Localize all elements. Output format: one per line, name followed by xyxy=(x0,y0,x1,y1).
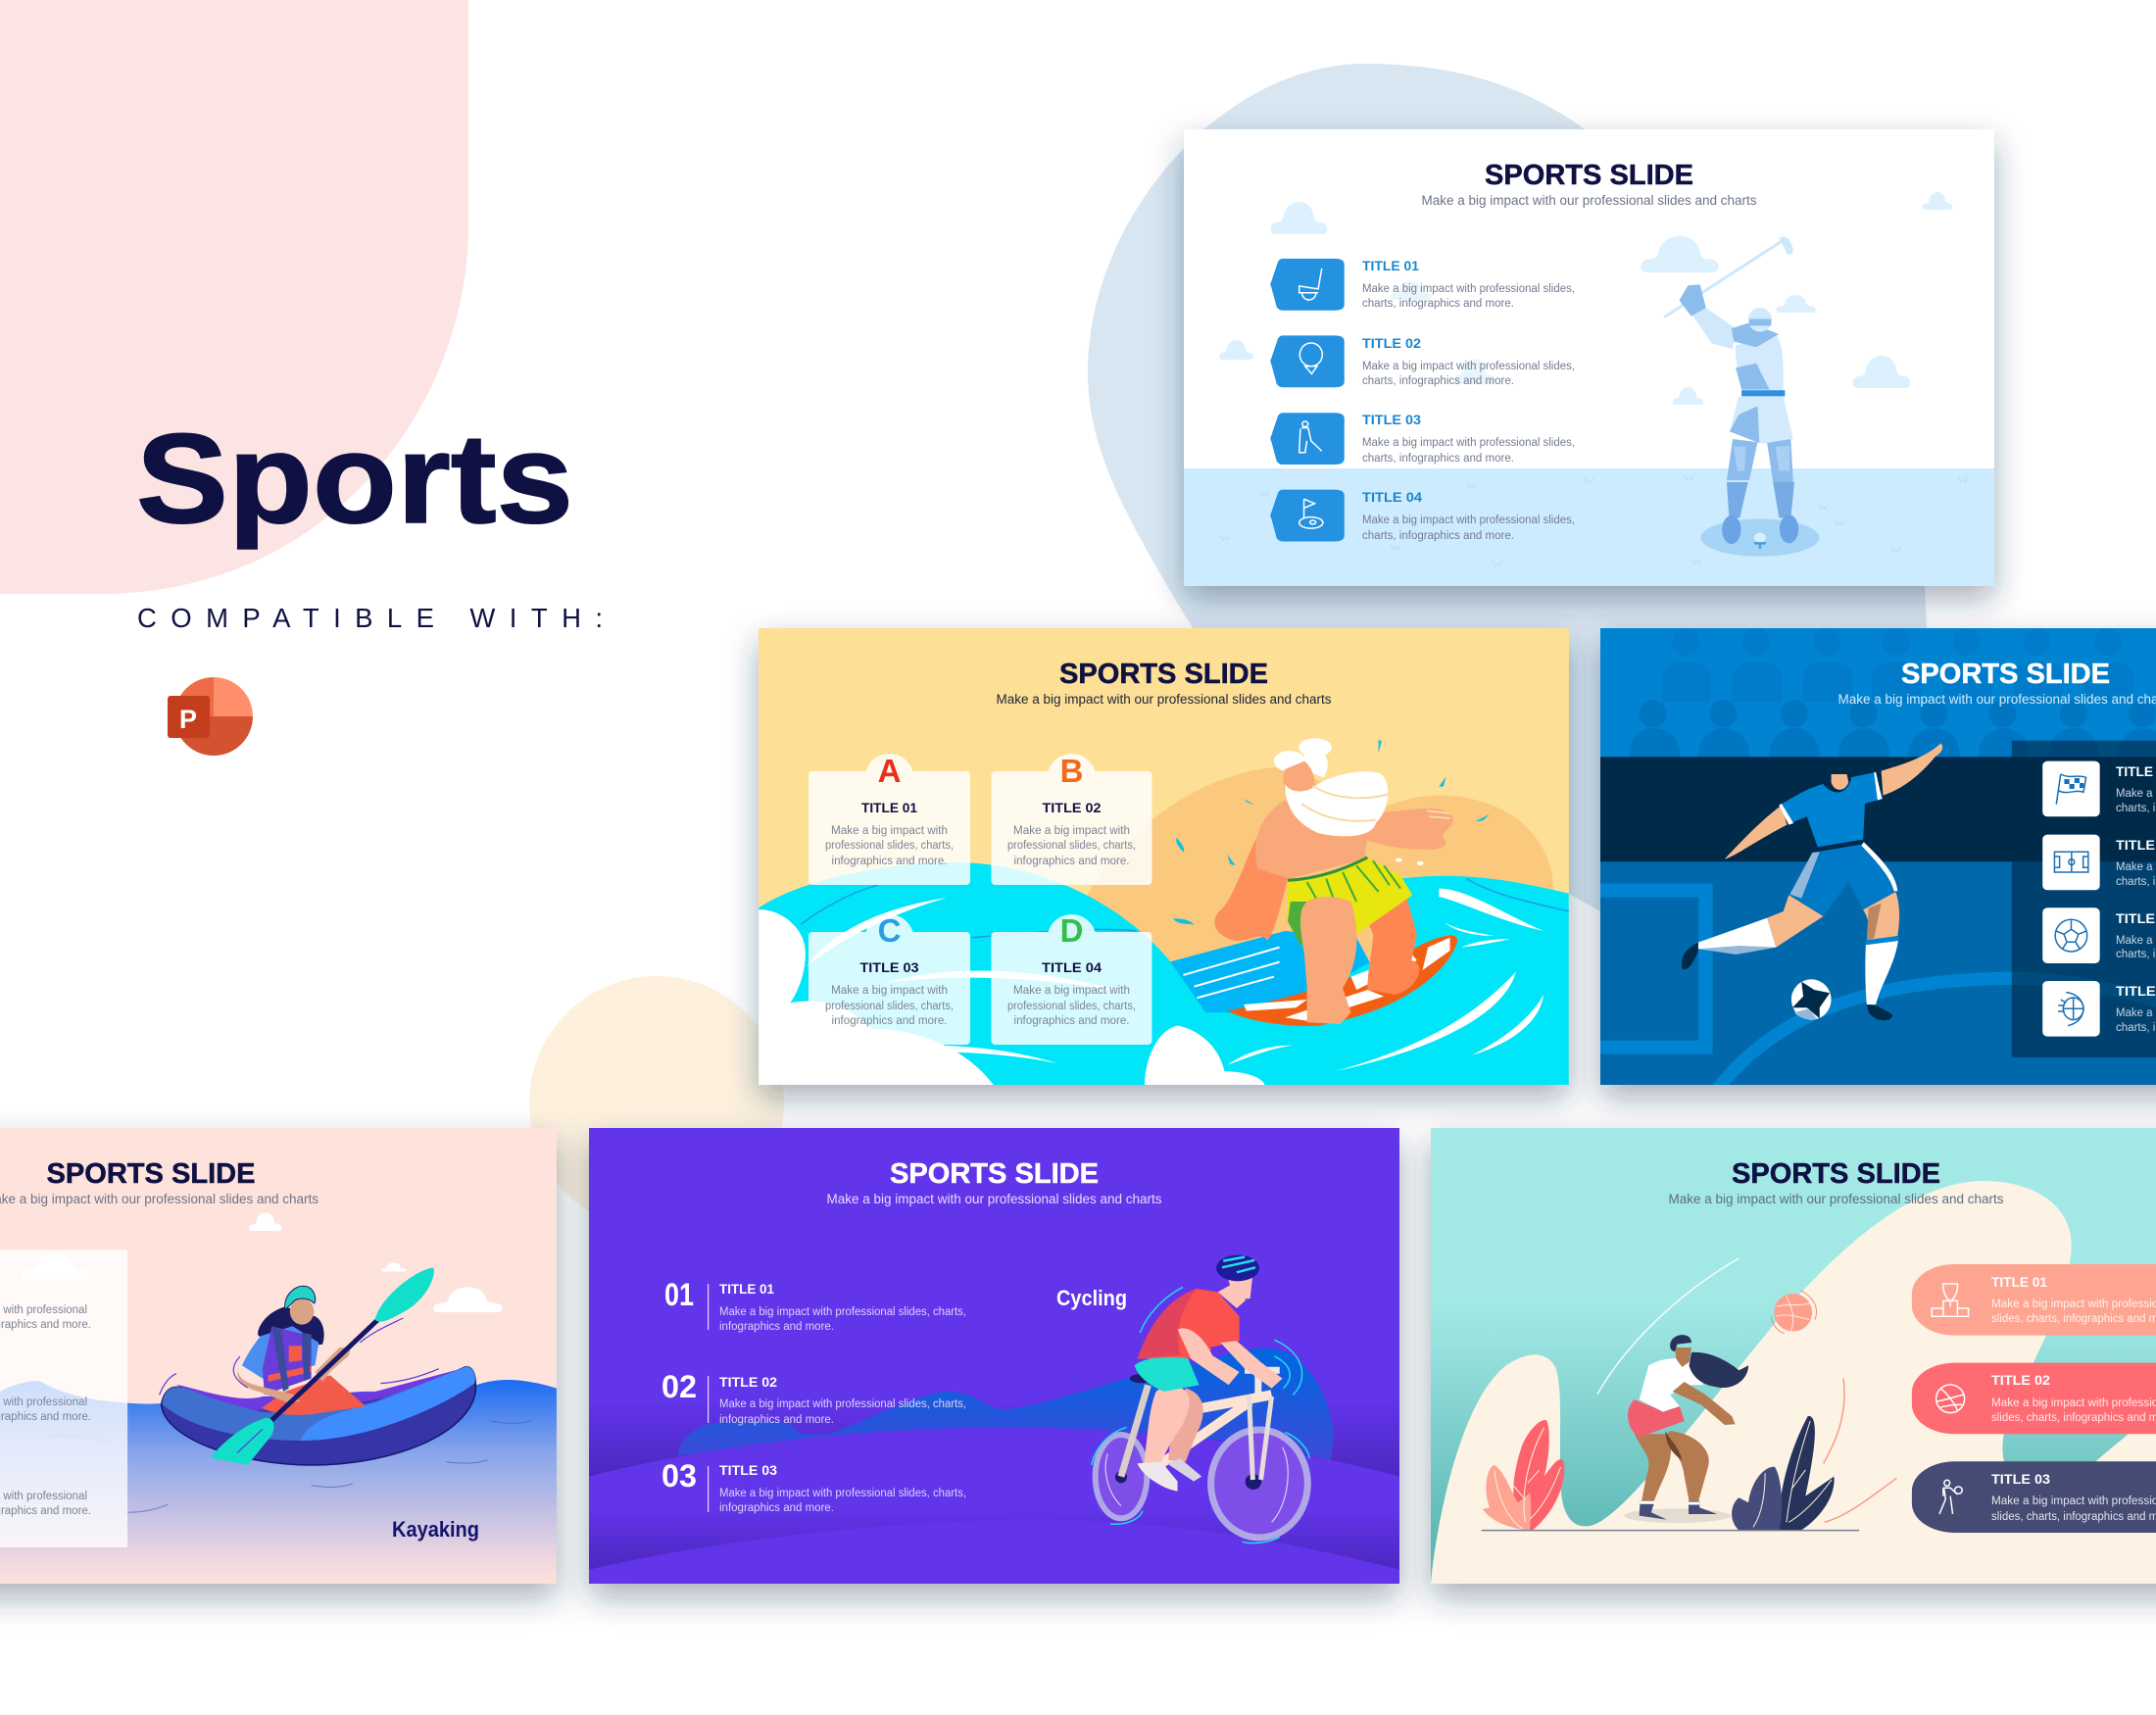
card text: TITLE 04 xyxy=(1042,959,1102,975)
card text: professional slides, charts, xyxy=(825,1001,954,1012)
card text: infographics and more. xyxy=(831,856,947,867)
item 03 xyxy=(662,1458,966,1514)
item 01: TITLE 01 xyxy=(719,1281,774,1297)
list text xyxy=(2116,763,2156,1034)
card text: professional slides, charts, xyxy=(1007,840,1136,852)
crowd silhouettes xyxy=(1662,628,2133,703)
ground line xyxy=(1482,1530,1859,1532)
card text: Make a big impact with xyxy=(1013,825,1130,837)
hexagon icon buttons xyxy=(1270,259,1345,541)
list text: charts, infographics and more. xyxy=(1362,530,1514,542)
list text: TITLE 01 xyxy=(1362,258,1419,273)
card text: infographics and more. xyxy=(1013,1015,1129,1027)
item 03: 03 xyxy=(662,1458,697,1494)
list text: TITLE 02 xyxy=(1362,335,1421,351)
heading: SPORTS SLIDE xyxy=(890,1158,1099,1190)
panel: football slide xyxy=(1588,628,2156,1091)
panel: cycling slide xyxy=(589,1128,1399,1585)
background blob: pink xyxy=(0,0,468,594)
item 02: 02 xyxy=(662,1369,697,1404)
cards A-D xyxy=(808,754,1152,1045)
list backdrop xyxy=(2012,741,2156,1057)
card text: Make a big impact with xyxy=(1013,985,1130,997)
heading: SPORTS SLIDE xyxy=(1732,1158,1940,1190)
heading: SPORTS SLIDE xyxy=(1485,160,1693,191)
subheading: Make a big impact with our professional slides and charts xyxy=(996,692,1332,707)
surfer illustration xyxy=(1173,738,1490,1026)
main title: Sports xyxy=(136,407,573,550)
pill text: TITLE 02 xyxy=(1991,1372,2050,1388)
icon: PowerPoint logo: P xyxy=(179,705,197,734)
subheading: Make a big impact with our professional slides and charts xyxy=(1421,193,1757,208)
card text xyxy=(825,800,1136,1027)
volleyball xyxy=(1771,1291,1817,1334)
item 02 xyxy=(662,1369,966,1426)
heading: SPORTS SLIDE xyxy=(1901,659,2110,690)
subheading: Make a big impact with our professional slides and charts xyxy=(1668,1192,2004,1206)
kayak xyxy=(162,1367,475,1465)
sun shape xyxy=(1087,767,1553,962)
pitch and dark band xyxy=(1588,861,2156,1091)
item 01: infographics and more. xyxy=(719,1321,834,1333)
item 02: infographics and more. xyxy=(719,1414,834,1426)
pill text: TITLE 01 xyxy=(1991,1274,2047,1290)
blue mountains xyxy=(677,1348,1334,1462)
ripple lines xyxy=(45,1420,532,1512)
card text: TITLE 02 xyxy=(1043,800,1102,815)
list text xyxy=(1362,258,1575,542)
card text: professional slides, charts, xyxy=(825,840,954,852)
card text: Make a big impact with xyxy=(831,825,948,837)
card letters xyxy=(878,753,1083,949)
card text: TITLE 03 xyxy=(860,959,919,975)
card letters: A xyxy=(878,753,901,789)
compatible with label: COMPATIBLE WITH: xyxy=(137,603,603,633)
card text: infographics and more. xyxy=(1013,856,1129,867)
list text: charts, infographics and more. xyxy=(1362,298,1514,310)
card letters: D xyxy=(1060,912,1083,949)
label: Cycling: Cycling xyxy=(1056,1286,1127,1310)
kayaker xyxy=(160,1267,439,1465)
golfer illustration xyxy=(1664,237,1819,557)
item 03: infographics and more. xyxy=(719,1502,834,1514)
goal box xyxy=(1600,884,1713,1054)
clouds xyxy=(1219,192,1952,405)
card text: Make a big impact with xyxy=(831,985,948,997)
item 03: TITLE 03 xyxy=(719,1462,777,1478)
pill text: TITLE 03 xyxy=(1991,1471,2050,1487)
card text: TITLE 01 xyxy=(861,800,917,815)
icon: PowerPoint logo xyxy=(168,677,253,756)
tile icons xyxy=(2054,774,2088,1026)
centre arc xyxy=(1713,972,2156,1085)
footballer illustration xyxy=(1682,743,1942,1020)
card text: infographics and more. xyxy=(831,1015,947,1027)
icon tiles xyxy=(2042,761,2100,1037)
list text: Make a big impact with professional slides, xyxy=(1362,283,1575,295)
text backdrop xyxy=(0,1250,127,1547)
pill icons xyxy=(1932,1284,1969,1514)
cyclist illustration xyxy=(1092,1255,1309,1544)
panel: surfing slide xyxy=(759,628,1569,1085)
item 01 xyxy=(664,1277,966,1333)
item 03: Make a big impact with professional slides, charts, xyxy=(719,1488,966,1499)
grass marks xyxy=(1220,474,1968,566)
heading: SPORTS SLIDE xyxy=(47,1158,255,1190)
panel: volleyball slide xyxy=(1431,1128,2156,1585)
waves xyxy=(759,862,1569,1085)
volleyball player xyxy=(1624,1335,1748,1523)
subheading: Make a big impact with our professional slides and charts xyxy=(827,1192,1162,1206)
card letters: C xyxy=(878,912,901,949)
motion lines xyxy=(1597,1258,1739,1395)
list text: Make a big impact with professional slides, xyxy=(1362,437,1575,449)
plants xyxy=(1483,1416,1835,1531)
card text: professional slides, charts, xyxy=(1007,1001,1136,1012)
background circle: peach xyxy=(529,976,784,1231)
list text: Make a big impact with professional slides, xyxy=(1362,514,1575,526)
list text: Make a big impact with professional slides, xyxy=(1362,361,1575,372)
list text xyxy=(0,1304,91,1517)
hill bands xyxy=(589,1416,1399,1476)
pills xyxy=(1912,1264,2156,1336)
item 02: TITLE 02 xyxy=(719,1374,777,1390)
pill text xyxy=(1991,1274,2156,1523)
cream shapes xyxy=(1431,1181,2156,1585)
card letters: B xyxy=(1060,753,1083,789)
list text: TITLE 04 xyxy=(1362,489,1422,505)
list text: charts, infographics and more. xyxy=(1362,375,1514,387)
list text: charts, infographics and more. xyxy=(1362,453,1514,465)
item 01: Make a big impact with professional slides, charts, xyxy=(719,1306,966,1318)
water xyxy=(0,1380,557,1585)
hill front xyxy=(589,1427,1399,1480)
heading: SPORTS SLIDE xyxy=(1059,659,1268,690)
list text: TITLE 03 xyxy=(1362,412,1421,427)
panel: golf slide xyxy=(1184,129,1994,586)
ground band xyxy=(1184,468,1994,586)
panel: kayaking slide xyxy=(0,1128,557,1585)
clouds xyxy=(21,1212,503,1312)
background blob: blue xyxy=(1088,64,1927,941)
label: Kayaking: Kayaking xyxy=(392,1517,479,1542)
teal background xyxy=(1431,1128,2156,1585)
item 02: Make a big impact with professional slides, charts, xyxy=(719,1398,966,1410)
item 01: 01 xyxy=(664,1277,694,1312)
